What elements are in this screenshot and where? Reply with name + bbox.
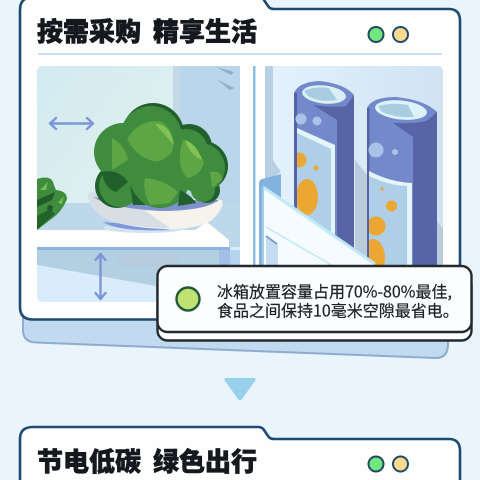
right compartment wall: [253, 66, 443, 265]
callout front layer: [158, 266, 472, 332]
arrow: vertical spacing: [96, 254, 106, 299]
icon: green bullet: [176, 288, 200, 310]
icon: yellow status dot: [393, 27, 408, 42]
icon: green status dot: [368, 27, 384, 42]
card shadow layer: [23, 318, 448, 358]
shelf surface: [38, 203, 120, 230]
fridge side wall: [173, 66, 240, 251]
heading: card 2 title: 节电低碳: [37, 442, 141, 479]
icon: plate: [88, 191, 223, 233]
icon: bottle 2: [367, 97, 437, 265]
callout text: 食品之间保持10毫米空隙最省电。: [217, 298, 459, 322]
illustration: fridge interior: [37, 66, 443, 304]
icon: green status dot: [368, 456, 384, 472]
heading: card 1 title: 按需采购: [37, 12, 141, 49]
arrow: down triangle: [224, 378, 256, 400]
lower shelf compartment: [37, 247, 240, 302]
icon: bottle 1: [294, 81, 354, 248]
icon: yellow status dot: [393, 456, 408, 472]
callout back layer: [158, 275, 472, 340]
callout text: 冰箱放置容量占用70%-80%最佳,: [217, 278, 452, 302]
arrow: horizontal spacing: [50, 118, 93, 129]
shelf front edge: [37, 222, 229, 247]
heading: card 1 title: 精享生活: [153, 12, 257, 49]
panel: fridge card: [20, 0, 460, 320]
icon: leafy vegetable at left edge: [37, 178, 67, 230]
heading: card 2 title: 绿色出行: [153, 442, 257, 479]
icon: broccoli: [94, 103, 228, 208]
door shelf: [259, 174, 376, 265]
callout: fridge capacity tip: [158, 266, 472, 340]
panel: green travel card: [20, 427, 460, 480]
fridge back wall: [37, 66, 173, 203]
